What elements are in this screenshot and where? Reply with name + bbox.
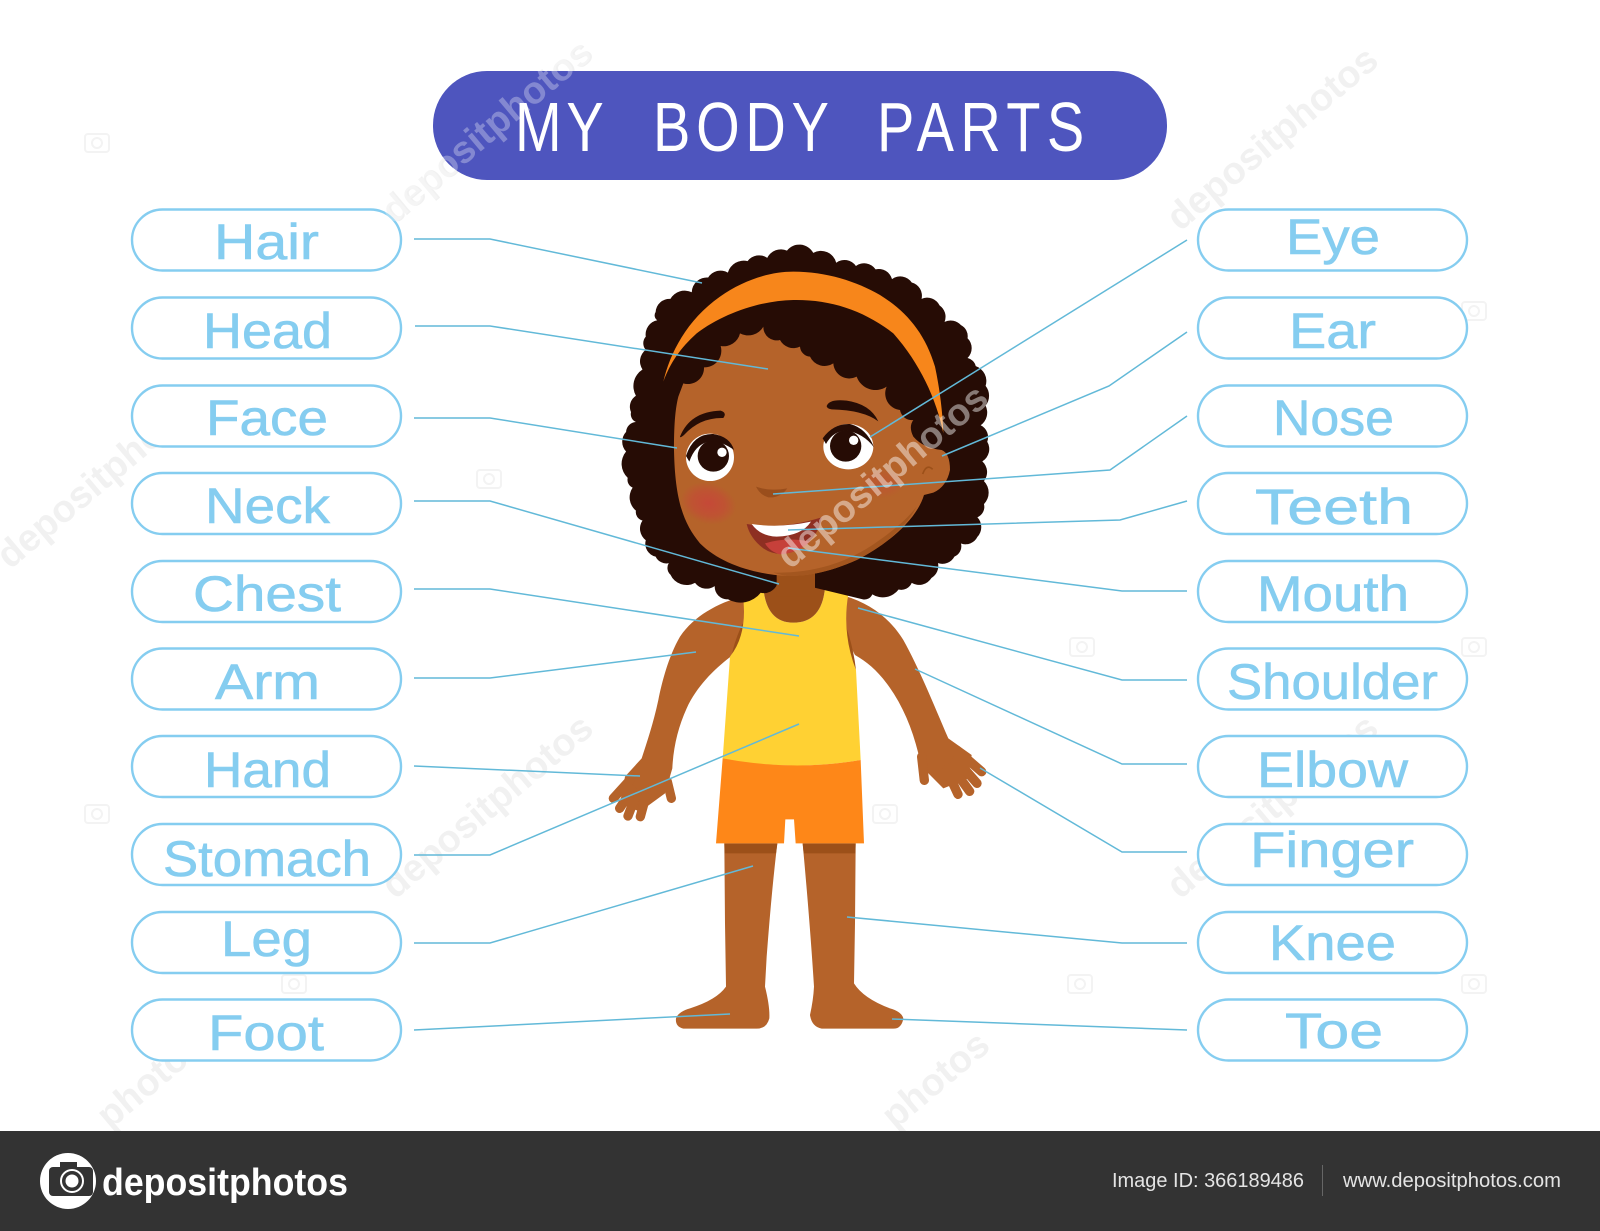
jaw shadow (773, 507, 917, 576)
label: Stomach (132, 824, 401, 887)
label: Hair: Hair (214, 214, 319, 270)
line: Teeth (788, 501, 1187, 530)
label: Head: Head (203, 303, 332, 359)
headband (663, 272, 943, 433)
figure body (613, 570, 982, 1029)
overlay watermarks: depositphotos (372, 31, 599, 232)
hair (622, 245, 989, 603)
label: Eye (1198, 209, 1467, 270)
shorts (716, 758, 864, 843)
legs and feet (676, 843, 903, 1029)
line: Nose (773, 416, 1187, 494)
right arm and hand (840, 596, 982, 794)
line: Hand (414, 766, 640, 776)
line: Ear (942, 332, 1187, 456)
background watermarks: photos (874, 1023, 998, 1137)
label: Foot: Foot (208, 1005, 324, 1061)
label: Shoulder: Shoulder (1227, 654, 1438, 710)
label: Finger: Finger (1250, 822, 1414, 878)
line: Shoulder (858, 608, 1187, 680)
label: Neck (132, 473, 401, 534)
line: Finger (980, 768, 1187, 852)
right eye (823, 424, 874, 469)
background watermarks: depositphotos (1159, 38, 1386, 239)
line: Mouth (788, 548, 1187, 591)
label: Elbow (1198, 736, 1467, 798)
left labels column (132, 210, 401, 1061)
line: Knee (847, 917, 1187, 943)
left arm and hand (613, 596, 747, 817)
title banner: PARTS (877, 89, 1084, 166)
label: Elbow: Elbow (1257, 742, 1409, 798)
label: Nose (1198, 386, 1467, 446)
label: Arm: Arm (215, 654, 320, 710)
head (622, 245, 989, 603)
line: Hair (414, 239, 702, 283)
leader lines (414, 239, 1187, 1030)
ear detail (923, 467, 933, 474)
label: Mouth (1198, 561, 1467, 622)
label: Face: Face (206, 390, 328, 446)
label: Hand: Hand (204, 742, 331, 798)
label: Eye: Eye (1286, 209, 1380, 265)
line: Neck (414, 501, 779, 584)
label: Leg: Leg (221, 911, 312, 967)
line: Face (414, 418, 677, 448)
label: Foot (132, 1000, 401, 1061)
label: Teeth (1198, 473, 1467, 535)
label: Hair (132, 210, 401, 270)
line: Head (415, 326, 768, 369)
image id: Image ID: 366189486 (1112, 1170, 1304, 1192)
label: Knee: Knee (1269, 915, 1396, 971)
tongue (765, 540, 810, 554)
line: Chest (414, 589, 799, 636)
overlay watermarks (372, 31, 996, 577)
label: Ear: Ear (1289, 303, 1376, 359)
label: Stomach: Stomach (163, 831, 371, 887)
icon: camera logo (40, 1153, 96, 1209)
left eye (686, 434, 734, 481)
neck (763, 570, 825, 623)
right labels column (1198, 209, 1467, 1060)
tank top (723, 588, 861, 766)
line: Stomach (414, 724, 799, 855)
line: Elbow (915, 669, 1187, 764)
label: Ear (1198, 298, 1467, 359)
label: Leg (132, 911, 401, 973)
label: Toe (1198, 1000, 1467, 1060)
line: Leg (414, 866, 753, 943)
character: girl (613, 245, 989, 1029)
armhole shadows (731, 623, 856, 670)
line: Foot (414, 1014, 730, 1030)
label: Teeth: Teeth (1255, 479, 1413, 535)
label: Mouth: Mouth (1257, 566, 1409, 622)
label: Chest: Chest (193, 566, 341, 622)
title banner (433, 71, 1167, 180)
logo wordmark: depositphotos (102, 1162, 348, 1204)
mouth (747, 517, 822, 554)
face (674, 327, 950, 576)
title banner: BODY (653, 89, 829, 166)
label: Toe: Toe (1285, 1003, 1383, 1059)
label: Hand (132, 736, 401, 798)
background watermarks: depositphotos (374, 706, 601, 907)
label: Knee (1198, 912, 1467, 973)
label: Nose: Nose (1273, 390, 1394, 446)
line: Eye (870, 240, 1187, 437)
nose (756, 487, 787, 497)
overlay watermarks: depositphotos (769, 376, 996, 577)
title banner: MY (515, 89, 604, 166)
label: Head (132, 298, 401, 359)
background watermarks: photos (89, 1023, 213, 1137)
label: Finger (1198, 822, 1467, 885)
background watermarks: depositphotos (1159, 706, 1386, 907)
label: Face (132, 386, 401, 446)
label: Neck: Neck (205, 478, 331, 534)
line: Toe (892, 1019, 1187, 1030)
label: Chest (132, 561, 401, 622)
background watermarks: depositphotos (374, 31, 601, 232)
label: Arm (132, 648, 401, 710)
blush (676, 476, 741, 531)
website url: www.depositphotos.com (1342, 1170, 1561, 1192)
neck under chin (777, 567, 815, 597)
footer bar (0, 1131, 1600, 1231)
line: Arm (414, 652, 696, 678)
eyebrows (680, 400, 878, 437)
teeth (752, 522, 811, 537)
label: Shoulder (1198, 648, 1467, 710)
